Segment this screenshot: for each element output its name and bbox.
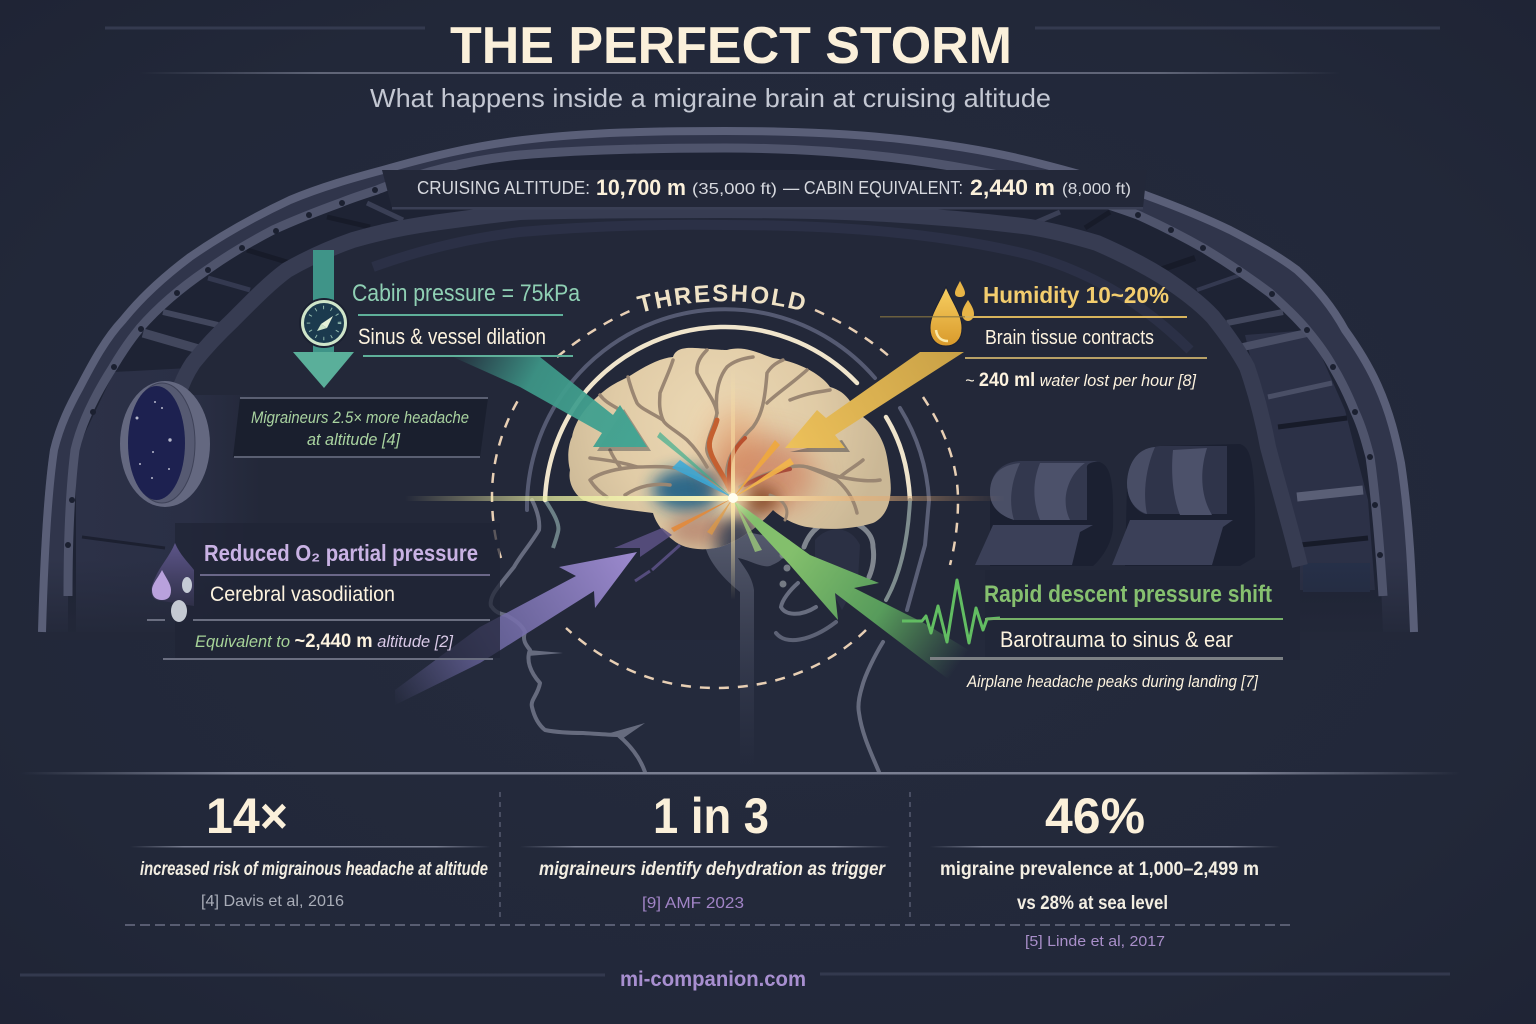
- stats dashed dividers: [125, 792, 1290, 925]
- big purple arrow: [395, 528, 680, 705]
- footer lines: [20, 974, 1450, 975]
- altitude banner: — CABIN EQUIVALENT:: [783, 178, 963, 198]
- text: brain tissue contracts: Brain tissue contracts: [985, 327, 1154, 349]
- seat 1: [975, 461, 1113, 566]
- outer band fill: [38, 128, 1418, 632]
- ear: [776, 519, 874, 640]
- text: equivalent altitude: Equivalent to ~2,440 m altitude [2]: [195, 631, 454, 652]
- icon: pressure gauge: [299, 298, 349, 348]
- head silhouette: [491, 500, 883, 772]
- brain: [568, 348, 891, 550]
- left wall: [76, 368, 262, 632]
- stat: 14x: [4] Davis et al, 2016: [201, 893, 344, 910]
- brain rings: [527, 309, 929, 610]
- second rim: [68, 148, 1383, 596]
- stat: 1 in 3: 1 in 3: [653, 788, 769, 844]
- seat 2: [1112, 444, 1255, 566]
- ear dots: [780, 552, 790, 588]
- stat: 1 in 3: migraineurs identify dehydration as trigger: [539, 859, 886, 880]
- hot vessels: [709, 420, 790, 490]
- stat: 46%: vs 28% at sea level: [1017, 893, 1168, 914]
- title: THE PERFECT STORM: [450, 17, 1012, 75]
- stat: 46%: 46%: [1045, 788, 1145, 844]
- brain stem: [545, 500, 790, 772]
- window: [120, 381, 210, 507]
- panel: humidity: [880, 281, 1207, 391]
- altitude banner: CRUISING ALTITUDE:: [417, 178, 590, 198]
- stat: 14x: increased risk of migrainous headache at altitude: [140, 859, 488, 880]
- inner panel fill: [68, 148, 1383, 632]
- wall fade: [30, 560, 1430, 640]
- rim ticks: [65, 187, 1383, 558]
- big green arrow: [733, 503, 985, 682]
- icon: pressure pulse: [902, 580, 1000, 643]
- threshold dashed ring: [492, 310, 958, 688]
- altitude banner: (35,000 ft): [692, 181, 777, 198]
- icon: water drops: [930, 281, 974, 346]
- stat: 1 in 3: [9] AMF 2023: [642, 895, 744, 912]
- subtitle: What happens inside a migraine brain at cruising altitude: [370, 83, 1051, 113]
- title underline: [140, 72, 1340, 74]
- panel: rapid descent: [902, 570, 1300, 691]
- text: cerebral vasodilation: Cerebral vasodiiation: [210, 583, 395, 606]
- altitude banner: (8,000 ft): [1062, 181, 1131, 198]
- icon: downward arrow: [293, 250, 354, 388]
- threshold label: THRESHOLD: [636, 284, 805, 312]
- text: water lost: ~ 240 ml water lost per hour [8]: [965, 370, 1197, 391]
- stat: 1 in 3: [520, 788, 890, 912]
- inner band: [178, 210, 1300, 566]
- central burst: [405, 365, 1005, 600]
- heading: humidity: Humidity 10~20%: [983, 282, 1169, 308]
- seats: [975, 444, 1255, 566]
- icon: oxygen droplets: [151, 543, 194, 622]
- brain veins: [590, 350, 880, 520]
- cabin arch structure: [30, 128, 1430, 640]
- callout: migraineurs at altitude: at altitude [4]: [307, 430, 401, 449]
- heading: rapid descent: Rapid descent pressure shift: [984, 581, 1272, 608]
- callout: migraineurs at altitude: Migraineurs 2.5× more headache: [251, 408, 469, 427]
- outer rim: [42, 131, 1414, 632]
- stat: 14x: 14×: [206, 788, 288, 844]
- stat: 14x: [130, 788, 490, 910]
- heading: cabin pressure: Cabin pressure = 75kPa: [352, 280, 581, 307]
- stat: 46%: [930, 788, 1280, 950]
- stat: 46%: [5] Linde et al, 2017: [1025, 933, 1165, 950]
- altitude banner: [382, 170, 1147, 210]
- big gold arrow: [785, 352, 964, 452]
- text: airplane headache: Airplane headache peaks during landing [7]: [966, 672, 1259, 691]
- heading: reduced O2: Reduced O₂ partial pressure: [204, 540, 478, 566]
- panel: cabin pressure: [293, 250, 581, 388]
- second inner arch: [373, 225, 1190, 350]
- panel: reduced oxygen: [147, 523, 500, 660]
- title side lines: [105, 26, 1440, 30]
- text: barotrauma: Barotrauma to sinus & ear: [1000, 627, 1233, 652]
- altitude banner: 2,440 m: [970, 175, 1055, 200]
- stat: 46%: migraine prevalence at 1,000–2,499 m: [940, 859, 1259, 880]
- text: sinus and vessel dilation: Sinus & vessel dilation: [358, 324, 546, 349]
- lower right panels: [1245, 330, 1375, 590]
- stats divider: [20, 772, 1460, 774]
- ribs left: [143, 203, 1368, 545]
- brain colour glows: [652, 407, 815, 575]
- footer url: mi-companion.com: [620, 968, 806, 991]
- big teal arrow: [453, 357, 651, 451]
- callout: migraineurs at altitude: [233, 397, 488, 458]
- inner area fill: [178, 210, 1300, 640]
- altitude banner: 10,700 m: [596, 175, 686, 200]
